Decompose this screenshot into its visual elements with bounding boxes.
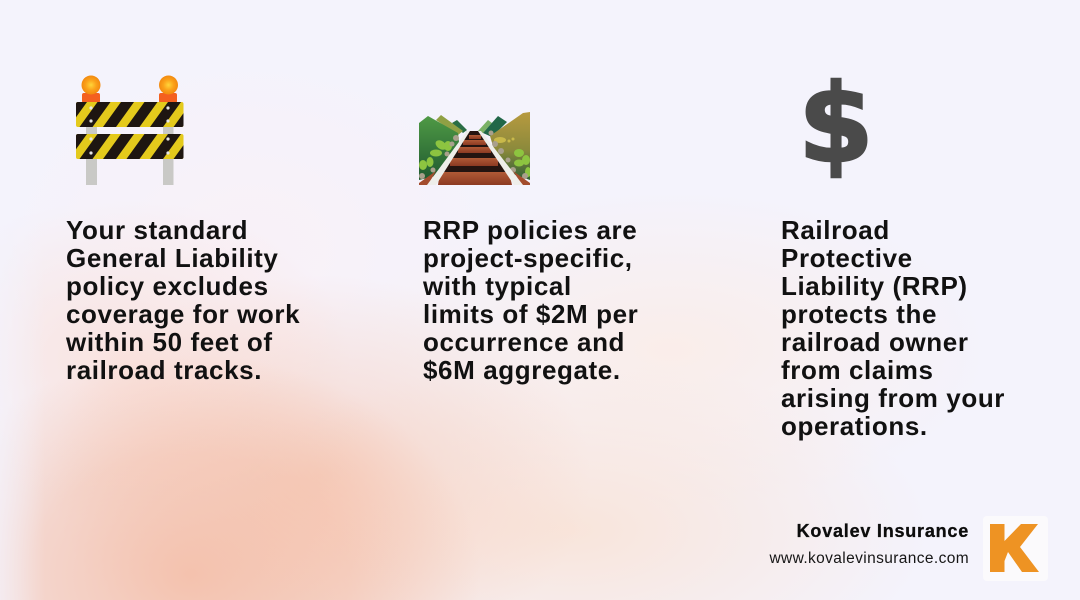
bushes and rocks bbox=[419, 130, 531, 179]
text: general liability exclusion bbox=[66, 215, 300, 385]
text: RRP protection explanation bbox=[781, 215, 1005, 441]
text: RRP protection explanation: Protective bbox=[781, 243, 913, 273]
text: RRP protection explanation: protects the bbox=[781, 299, 937, 329]
website url: www.kovalevinsurance.com bbox=[769, 550, 969, 567]
text: RRP policy limits: with typical bbox=[423, 271, 572, 301]
text: RRP protection explanation: from claims bbox=[781, 355, 934, 385]
brand name: Kovalev Insurance bbox=[797, 521, 969, 541]
text: general liability exclusion: railroad tracks. bbox=[66, 355, 262, 385]
text: general liability exclusion: within 50 feet of bbox=[66, 327, 273, 357]
text: RRP protection explanation: Liability (RRP) bbox=[781, 271, 968, 301]
text: RRP protection explanation: operations. bbox=[781, 411, 928, 441]
text: RRP policy limits: RRP policies are bbox=[423, 215, 637, 245]
text: RRP policy limits bbox=[422, 215, 638, 385]
text: general liability exclusion: Your standard bbox=[66, 215, 248, 245]
text: general liability exclusion: policy excludes bbox=[66, 271, 269, 301]
text: general liability exclusion: General Liability bbox=[66, 243, 278, 273]
text: RRP protection explanation: railroad owner bbox=[781, 327, 969, 357]
text: RRP policy limits: occurrence and bbox=[423, 327, 625, 357]
text: general liability exclusion: coverage for work bbox=[66, 299, 300, 329]
text: RRP policy limits: limits of $2M per bbox=[423, 299, 638, 329]
icon: road barricade bbox=[76, 76, 184, 185]
icon: railway track bbox=[419, 112, 530, 185]
text: RRP policy limits: project-specific, bbox=[423, 243, 633, 273]
icon: dollar sign: $ bbox=[798, 62, 874, 187]
text: RRP protection explanation: arising from your bbox=[781, 383, 1005, 413]
text: RRP protection explanation: Railroad bbox=[781, 215, 890, 245]
text: RRP policy limits: $6M aggregate. bbox=[423, 355, 621, 385]
logo: Kovalev K bbox=[990, 524, 1039, 572]
